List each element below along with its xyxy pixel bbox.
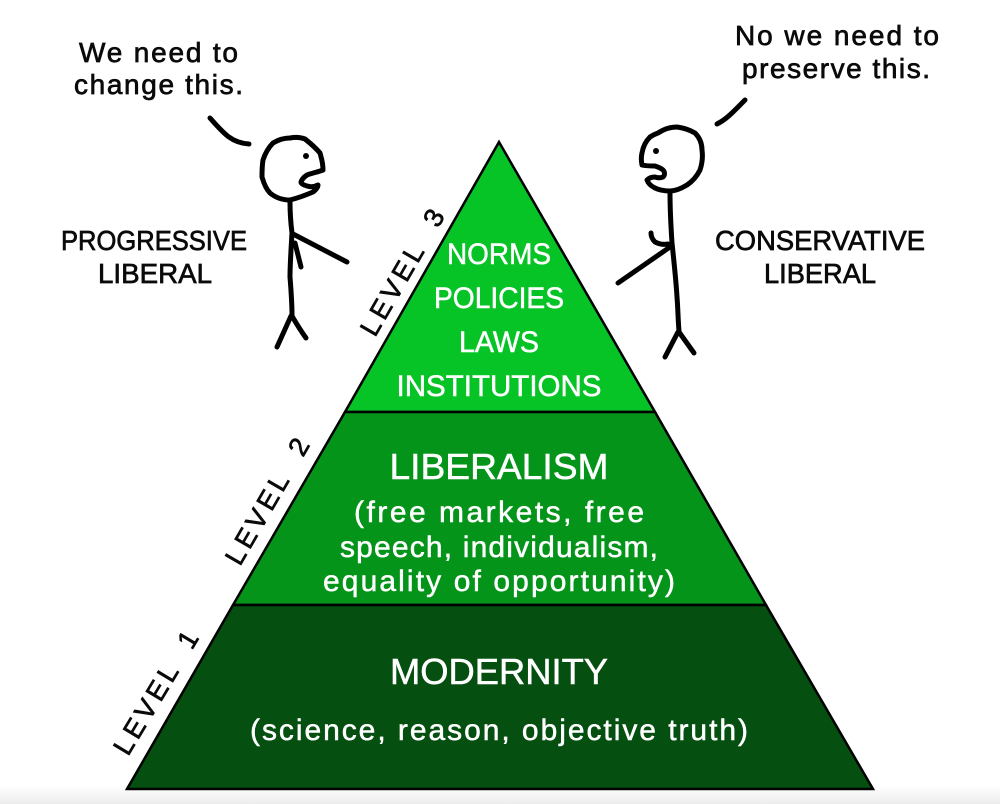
label: progressive liberal: LIBERAL [98,258,212,289]
speech text: We need to [79,37,238,68]
label: level 1: 1 [171,622,207,654]
level 2 text [323,446,675,598]
label: conservative liberal [715,225,925,289]
label: level 3: 3 [417,200,453,232]
pyramid level 1 tier [127,605,873,789]
speech tail [210,118,249,144]
level 1 text [250,651,748,747]
label: progressive liberal: PROGRESSIVE [61,225,247,256]
label: conservative liberal: CONSERVATIVE [715,225,925,256]
stick figure: conservative [618,127,702,357]
speech text [735,20,939,84]
level 2 text: LIBERALISM [390,446,608,487]
level 1 text: MODERNITY [390,651,608,692]
pyramid level 2 tier [233,412,766,605]
level 3 text: NORMS [447,238,551,271]
pyramid level 3 tier [345,142,655,412]
conservative speech bubble [717,20,939,124]
label: level 1: LEVEL [107,655,187,760]
label: progressive liberal [61,225,247,289]
level 3 text: POLICIES [434,282,564,315]
speech text: change this. [74,69,243,100]
stick figure: progressive [262,137,347,347]
speech text: No we need to [735,20,939,51]
speech tail [717,100,745,124]
pyramid [127,142,873,789]
level 2 text: equality of opportunity) [323,565,675,598]
level 3 text: LAWS [459,326,539,359]
label: level 3: LEVEL [354,236,432,341]
level 3 text [396,238,602,403]
label: level 2: LEVEL [219,465,297,570]
level 2 text: (free markets, free [354,496,644,529]
speech text [74,37,243,100]
level 3 text: INSTITUTIONS [396,370,602,403]
label: conservative liberal: LIBERAL [764,258,876,289]
level 2 text: speech, individualism, [340,531,658,564]
speech text: preserve this. [742,53,930,84]
label: level 2: 2 [282,429,318,461]
level 1 text: (science, reason, objective truth) [250,714,748,747]
progressive speech bubble [74,37,249,144]
